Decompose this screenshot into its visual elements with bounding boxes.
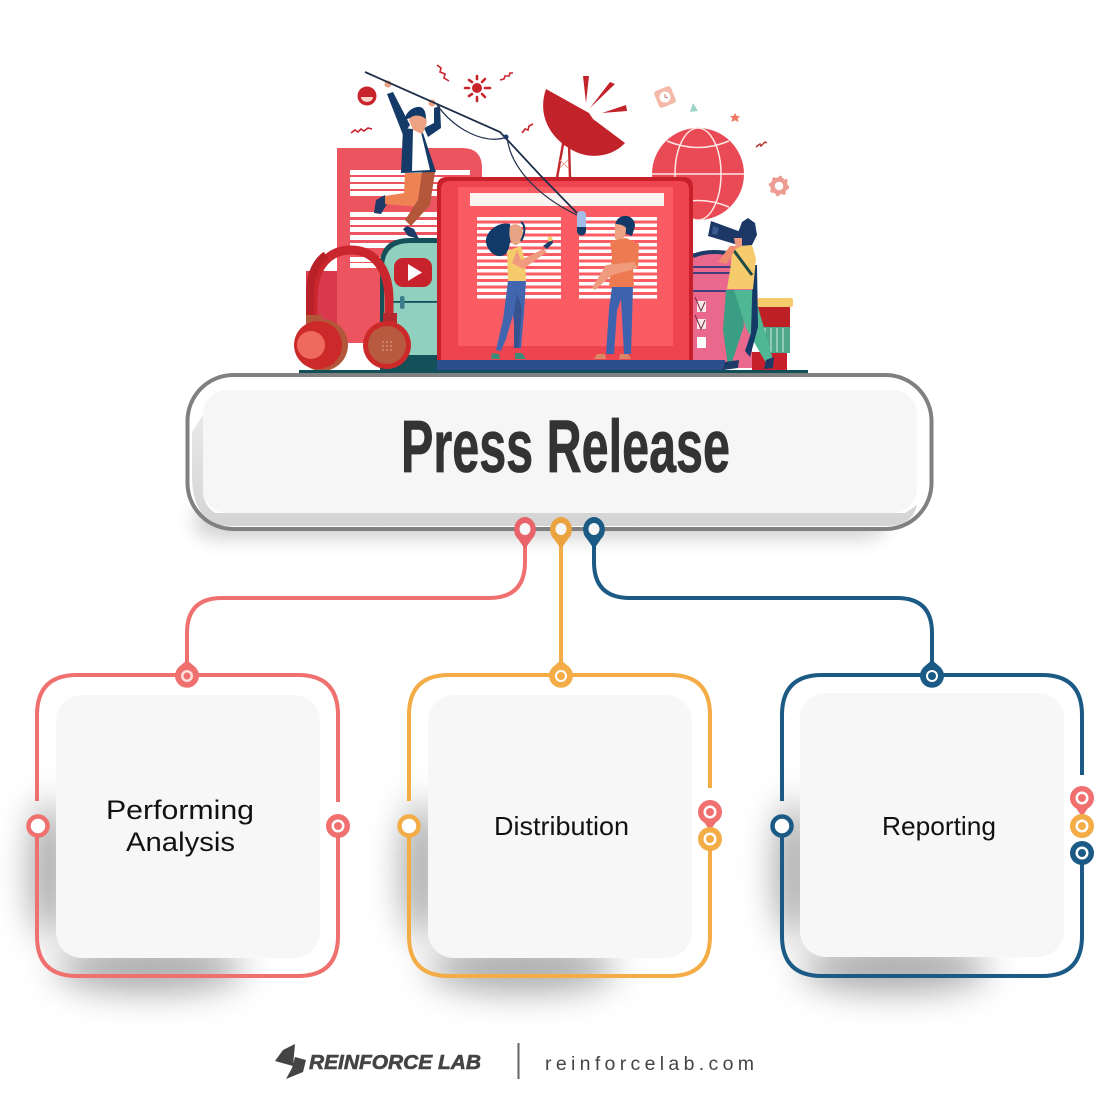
card face: [800, 693, 1064, 957]
card outline: [409, 675, 710, 976]
satellite dish: [543, 76, 627, 178]
left ring pin: [28, 816, 48, 836]
card face: [56, 695, 320, 958]
panel: main title box: [188, 375, 932, 537]
box drop shadow: [195, 505, 885, 537]
card label: Reporting: [882, 811, 996, 841]
right pins: [698, 800, 722, 851]
woman reporter with microphone: [486, 222, 553, 359]
laptop with press release screen: [437, 177, 725, 372]
title: Press Release: [401, 405, 730, 488]
footer: brand: [275, 1043, 754, 1079]
website: reinforcelab.com: [545, 1053, 754, 1075]
cameraman: [708, 218, 774, 370]
jumping man pulling boom pole: [374, 80, 441, 239]
divider: [518, 1043, 520, 1079]
small floating icons: clock, triangle, star, squiggle, gear: [653, 85, 788, 195]
left ring pin: [400, 816, 418, 836]
box inner face: [203, 390, 917, 513]
card face: [428, 695, 692, 958]
panel: Distribution: [400, 660, 722, 992]
globe: [652, 128, 744, 220]
card shadow: [402, 800, 617, 992]
card label: Distribution: [494, 811, 629, 841]
brand name: REINFORCE LAB: [309, 1052, 481, 1074]
icon: Reinforce Lab logo mark: [275, 1044, 306, 1079]
illustration: press and media scene: [294, 65, 808, 373]
box outline: [188, 375, 932, 529]
card outline: [37, 675, 338, 976]
top pin: [920, 660, 944, 688]
card label: Analysis: [126, 827, 235, 857]
panel: Reporting: [772, 660, 1094, 992]
card shadow: [775, 800, 990, 992]
boom pole, wires and microphone: [365, 72, 586, 236]
card label: [106, 795, 254, 857]
headphones: [294, 250, 411, 371]
video player device: [380, 238, 440, 370]
connector: blue line to Reporting: [594, 535, 932, 675]
back document page: [306, 148, 482, 343]
right pins: [1070, 786, 1094, 865]
man being interviewed: [592, 216, 639, 359]
card outline: [782, 675, 1082, 976]
top pin: [175, 660, 199, 688]
right pin: [326, 814, 350, 838]
decorative icons: sun, smiley and squiggles: [351, 65, 533, 133]
connector: orange line to Distribution: [559, 535, 563, 675]
connector: red line to Performing Analysis: [187, 535, 525, 675]
panel: Performing Analysis: [28, 660, 350, 992]
ground line: [299, 370, 808, 373]
card shadow: [30, 800, 245, 992]
left ring pin: [772, 816, 792, 836]
connector pins on title box: [514, 517, 605, 549]
card label: Performing: [106, 795, 254, 825]
top pin: [549, 660, 573, 688]
coffee cup: [752, 298, 793, 370]
box bevel: [192, 415, 917, 526]
pink checklist notebook: [693, 252, 752, 368]
